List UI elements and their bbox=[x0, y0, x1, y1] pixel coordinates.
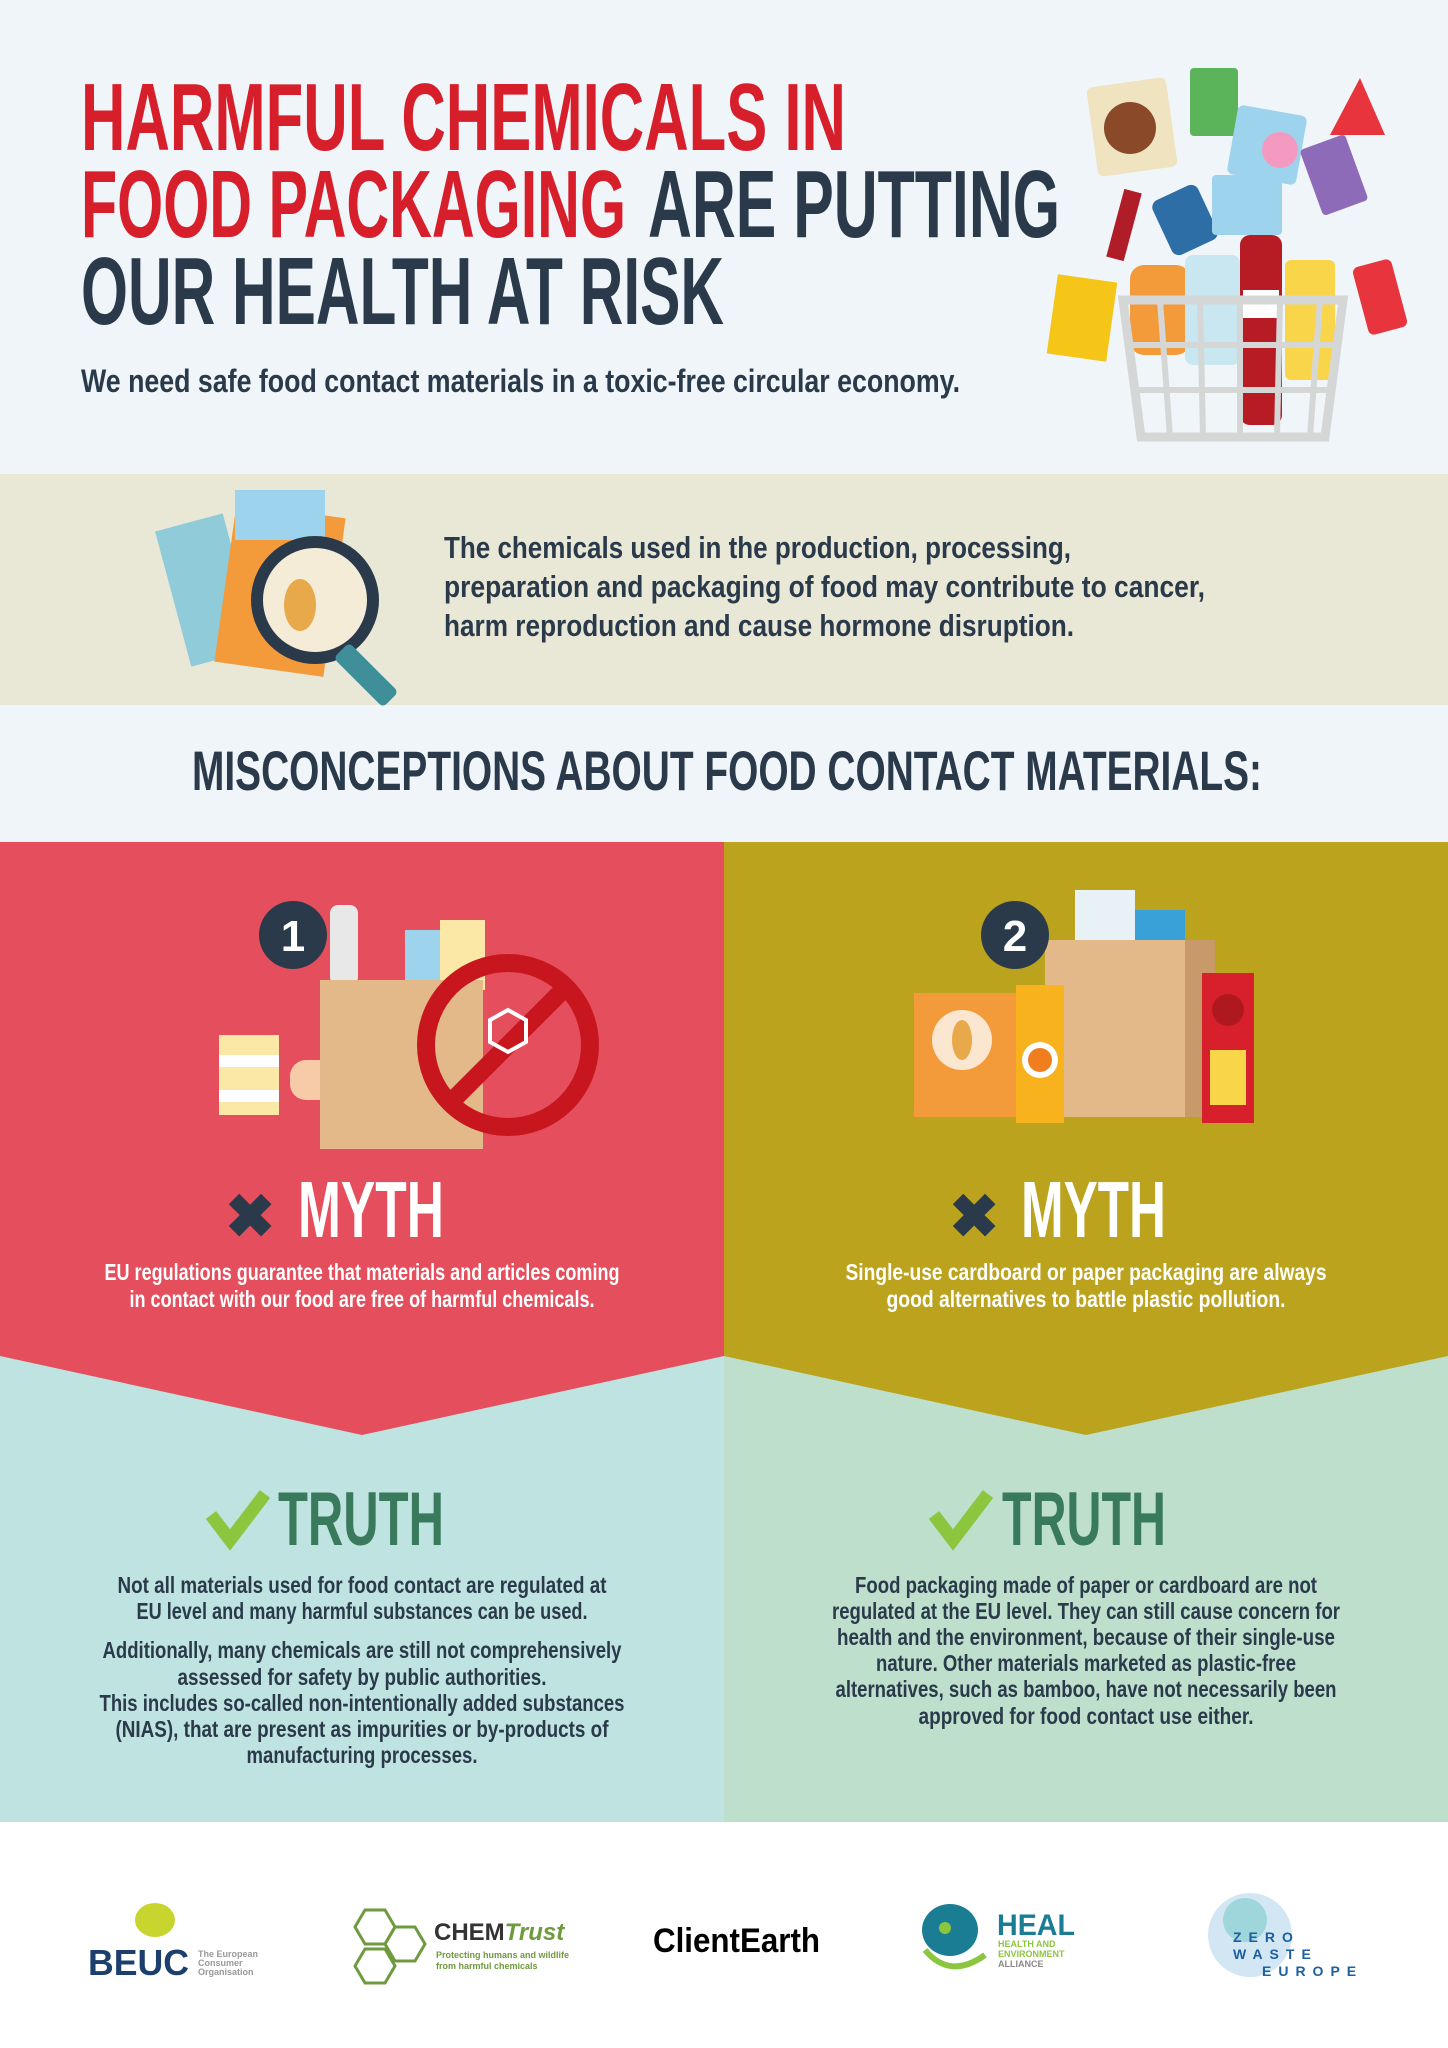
panel: truth 1 bbox=[100, 1477, 624, 1768]
truth heading 1 bbox=[211, 1477, 444, 1562]
logo: BEUC: Consumer bbox=[198, 1958, 243, 1968]
subtitle: We need safe food contact materials in a toxic-free circular economy. bbox=[81, 363, 960, 399]
truth text 1: manufacturing processes. bbox=[246, 1742, 478, 1768]
logo: HEAL: HEALTH AND bbox=[998, 1939, 1056, 1949]
truth text 1: Additionally, many chemicals are still not comprehensively bbox=[102, 1637, 622, 1663]
title: HARMFUL CHEMICALS IN bbox=[81, 64, 846, 171]
number badge 2 bbox=[981, 901, 1049, 969]
truth text 1 bbox=[100, 1572, 624, 1768]
truth heading 2 bbox=[934, 1477, 1166, 1562]
myth heading 1 bbox=[225, 1165, 444, 1254]
truth text 2: regulated at the EU level. They can still cause concern for bbox=[832, 1598, 1340, 1624]
truth text 2: health and the environment, because of their single-use bbox=[837, 1624, 1335, 1650]
number badge 1: 1 bbox=[281, 912, 305, 961]
truth text 1: EU level and many harmful substances can be used. bbox=[136, 1598, 588, 1624]
logo: BEUC: The European bbox=[198, 1949, 258, 1959]
truth text 2: approved for food contact use either. bbox=[918, 1703, 1254, 1729]
myth text 2: Single-use cardboard or paper packaging are always bbox=[846, 1259, 1326, 1285]
logo: CHEM Trust: from harmful chemicals bbox=[436, 1961, 538, 1971]
logo: Zero Waste Europe: EUROPE bbox=[1262, 1963, 1363, 1979]
truth text 2: Food packaging made of paper or cardboard are not bbox=[855, 1572, 1317, 1598]
panel: myth 1 bbox=[0, 842, 724, 1435]
intro text bbox=[444, 530, 1205, 643]
logo: BEUC bbox=[88, 1903, 258, 1983]
panel: truth 2 bbox=[832, 1477, 1340, 1729]
logo: CHEM Trust: CHEMTrust bbox=[434, 1919, 565, 1946]
title: FOOD PACKAGING bbox=[81, 151, 626, 258]
truth text 2: nature. Other materials marketed as plastic-free bbox=[876, 1650, 1296, 1676]
title: OUR HEALTH AT RISK bbox=[81, 238, 724, 345]
truth text 1: (NIAS), that are present as impurities or by-products of bbox=[116, 1716, 609, 1742]
myth text 1: in contact with our food are free of harmful chemicals. bbox=[130, 1286, 594, 1312]
truth text 2: alternatives, such as bamboo, have not necessarily been bbox=[836, 1676, 1336, 1702]
panel: myth 2 bbox=[724, 842, 1448, 1435]
logo: HEAL: HEAL bbox=[997, 1909, 1075, 1942]
logo: CHEM Trust: Protecting humans and wildlife bbox=[436, 1950, 569, 1960]
logo: Zero Waste Europe: ZERO bbox=[1233, 1929, 1300, 1945]
truth text 1: assessed for safety by public authorities. bbox=[178, 1664, 546, 1690]
myth text 1: EU regulations guarantee that materials and articles coming bbox=[104, 1259, 620, 1285]
logo: Zero Waste Europe bbox=[1208, 1893, 1363, 1979]
title bbox=[81, 64, 1060, 345]
truth heading 1: TRUTH bbox=[278, 1477, 444, 1562]
icon: shopping basket with packaged food bbox=[1047, 68, 1408, 437]
truth text 1: Not all materials used for food contact are regulated at bbox=[118, 1572, 607, 1598]
myth heading 2 bbox=[949, 1165, 1166, 1254]
myth heading 1: MYTH bbox=[298, 1165, 444, 1254]
intro text: The chemicals used in the production, processing, bbox=[444, 530, 1071, 565]
logo: Zero Waste Europe: WASTE bbox=[1233, 1946, 1318, 1962]
myth text 2: good alternatives to battle plastic pollution. bbox=[886, 1286, 1286, 1312]
icon: bag with prohibited chemicals bbox=[219, 901, 590, 1149]
myth text 1 bbox=[104, 1259, 620, 1312]
logo: HEAL: ALLIANCE bbox=[998, 1959, 1044, 1969]
icon: paper bag and cardboard packaging bbox=[914, 890, 1254, 1123]
truth text 1: This includes so-called non-intentionally added substances bbox=[100, 1690, 624, 1716]
myth heading 1: ✖ bbox=[225, 1183, 275, 1250]
intro text: harm reproduction and cause hormone disruption. bbox=[444, 608, 1074, 643]
myth text 2 bbox=[846, 1259, 1326, 1312]
logo: BEUC: BEUC bbox=[88, 1942, 189, 1983]
logo: ClientEarth: ClientEarth bbox=[653, 1922, 820, 1960]
intro text: preparation and packaging of food may contribute to cancer, bbox=[444, 569, 1205, 604]
title: ARE PUTTING bbox=[648, 151, 1060, 258]
icon: magnifier over packaging bbox=[155, 490, 399, 708]
logo: BEUC: Organisation bbox=[198, 1967, 254, 1977]
truth text 2 bbox=[832, 1572, 1340, 1729]
myth heading 2: ✖ bbox=[949, 1183, 999, 1250]
number badge 1 bbox=[259, 901, 327, 969]
truth heading 2: TRUTH bbox=[1002, 1477, 1166, 1562]
number badge 2: 2 bbox=[1003, 912, 1027, 961]
logo: CHEM Trust bbox=[355, 1910, 569, 1983]
myth heading 2: MYTH bbox=[1021, 1165, 1166, 1254]
logo: HEAL: ENVIRONMENT bbox=[998, 1949, 1065, 1959]
logo: HEAL bbox=[922, 1904, 1075, 1969]
